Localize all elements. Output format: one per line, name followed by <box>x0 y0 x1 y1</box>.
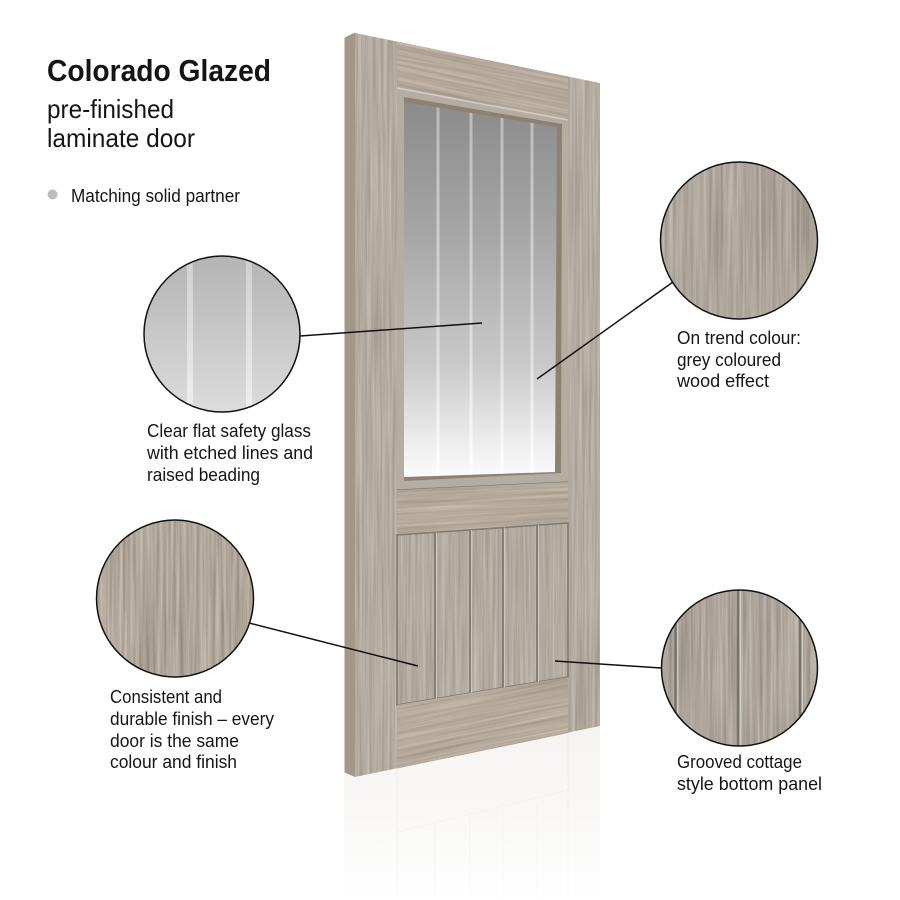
circle: finish detail <box>96 520 254 678</box>
door side edge <box>344 32 355 777</box>
caption: colour: grey coloured <box>677 350 781 370</box>
caption: colour <box>676 328 801 391</box>
door stiles and frame <box>355 32 600 778</box>
caption: groove: Grooved cottage <box>677 752 802 772</box>
subtitle <box>47 94 195 153</box>
door reflection <box>344 726 600 900</box>
etched lines <box>436 100 534 480</box>
circle: wood colour detail <box>660 162 818 320</box>
caption: glass: raised beading <box>147 465 260 485</box>
caption: glass: Clear flat safety glass <box>147 421 311 441</box>
caption: colour: wood effect <box>676 371 769 391</box>
caption: finish <box>110 687 274 772</box>
top rail <box>397 42 568 119</box>
beading frame <box>397 88 568 490</box>
circle: glass detail <box>144 256 300 412</box>
circle: groove detail <box>661 590 819 748</box>
subtitle: laminate door <box>47 123 195 153</box>
caption: glass: with etched lines and <box>146 443 313 463</box>
caption: groove: style bottom panel <box>677 774 822 794</box>
leader lines <box>249 282 673 668</box>
bullet: matching solid partner: Matching solid partner <box>71 186 240 206</box>
caption: colour: On trend colour: <box>677 328 801 348</box>
mid rail <box>397 482 568 534</box>
caption: glass <box>146 421 313 485</box>
bottom rail <box>397 677 568 768</box>
subtitle: pre-finished <box>47 94 174 124</box>
grooved bottom panel <box>397 523 568 705</box>
caption: groove <box>677 752 822 794</box>
caption: finish: durable finish – every <box>110 709 274 729</box>
caption: finish: Consistent and <box>110 687 222 707</box>
caption: finish: door is the same <box>110 731 239 751</box>
glass pane <box>404 100 559 480</box>
title: Colorado Glazed <box>47 53 271 88</box>
caption: finish: colour and finish <box>110 752 237 772</box>
door <box>344 32 600 778</box>
